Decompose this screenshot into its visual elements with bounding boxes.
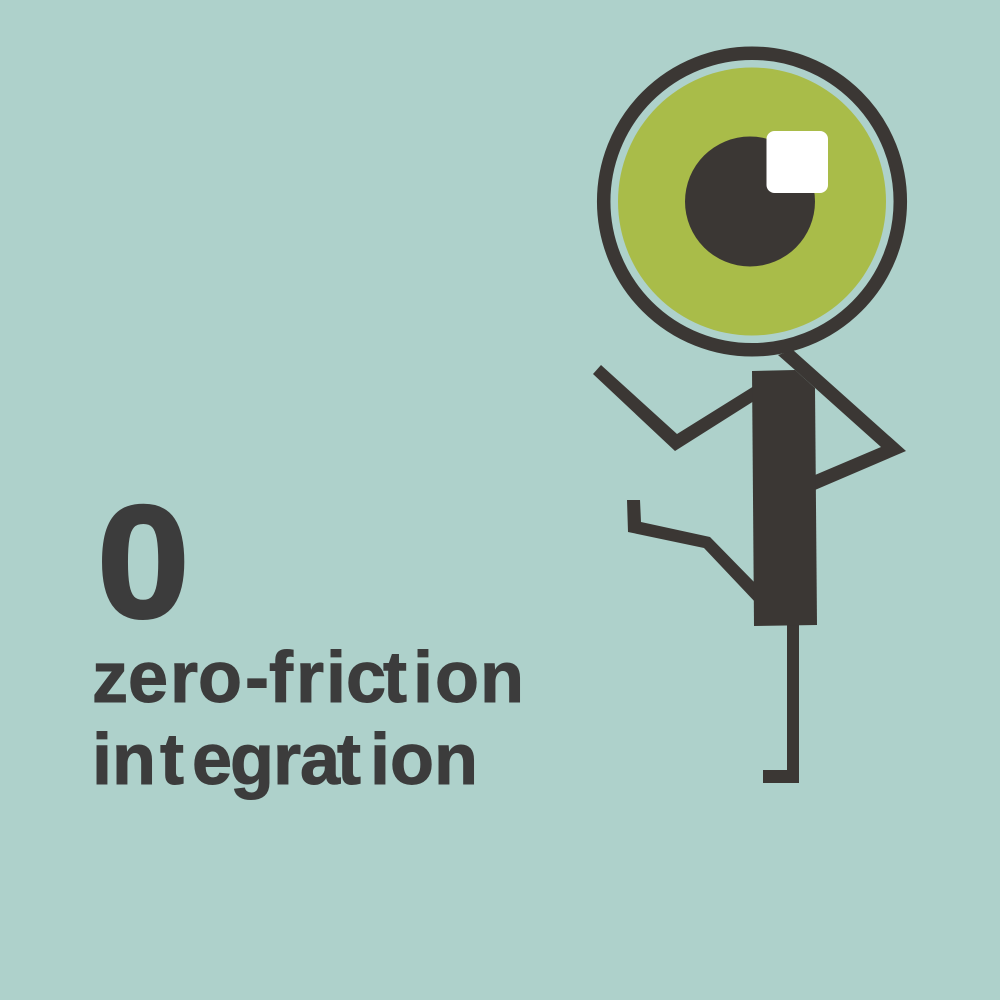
caption: integration (92, 720, 478, 800)
eye outline (604, 53, 900, 350)
eye highlight (766, 131, 828, 193)
caption: zero-friction (92, 638, 524, 718)
left arm (593, 365, 754, 451)
big number: 0 (97, 472, 190, 651)
raised leg (627, 500, 756, 603)
body (752, 370, 817, 626)
right arm (778, 350, 906, 490)
pupil (685, 136, 815, 266)
figure: eye-headed stick character (593, 53, 906, 783)
standing leg (763, 624, 799, 783)
iris (618, 68, 886, 336)
